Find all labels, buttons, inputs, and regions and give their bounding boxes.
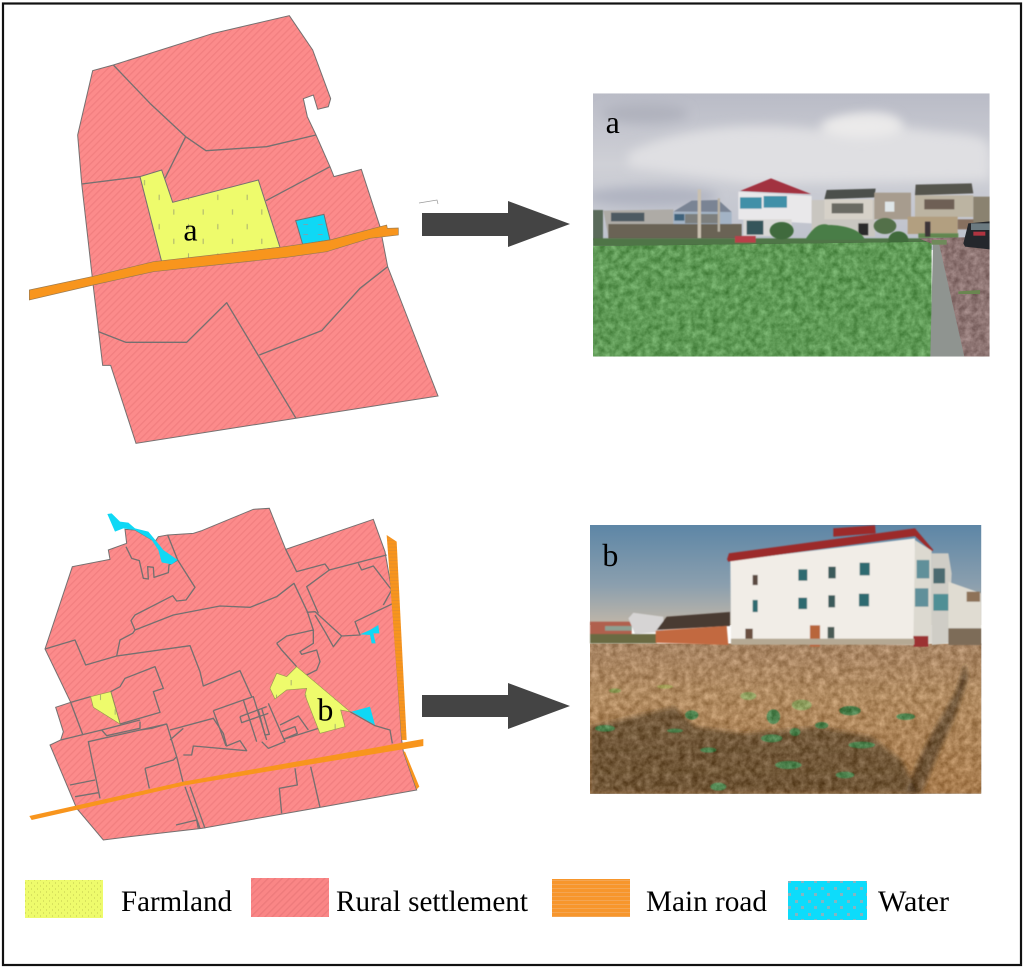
map a: upper village land use — [29, 16, 438, 443]
paved road and kerb — [918, 237, 990, 357]
parcel boundaries a — [82, 65, 388, 418]
legend: main road: Main road — [646, 885, 767, 918]
legend: water: Water — [878, 885, 949, 918]
arrow b — [422, 683, 570, 729]
legend: rural settlement: Rural settlement — [336, 885, 529, 918]
legend: farmland — [25, 880, 232, 918]
houses row — [593, 178, 990, 240]
farmland parcel a — [140, 170, 280, 262]
field shadows — [590, 663, 968, 794]
main road a — [29, 225, 398, 300]
legend — [25, 878, 949, 920]
water parcels b — [107, 513, 379, 725]
sky with clouds — [585, 93, 990, 250]
green field — [593, 242, 932, 357]
soil field with shadows and seedlings — [590, 643, 981, 794]
water parcel a — [296, 214, 330, 244]
map b: lower village land use — [29, 508, 423, 840]
legend: water — [788, 881, 949, 920]
farmland parcels b — [91, 667, 350, 733]
evening sky — [590, 525, 981, 625]
label a on map: a — [183, 212, 198, 248]
rural settlement area b — [45, 508, 417, 840]
background houses — [590, 612, 730, 645]
legend: main road — [552, 879, 767, 918]
label b on map: b — [317, 692, 333, 728]
photo b: ploughed field and white house — [590, 525, 981, 794]
hedge and shrubs — [593, 218, 959, 246]
label a on photo: a — [606, 104, 620, 140]
arrow a — [422, 201, 570, 247]
legend: rural settlement — [251, 878, 529, 918]
legend: farmland: Farmland — [121, 885, 232, 918]
main road b — [29, 535, 423, 820]
seedlings — [595, 685, 915, 791]
rural settlement area a — [78, 16, 438, 443]
parked car — [963, 221, 990, 249]
parcel boundaries b — [45, 535, 393, 828]
photo a: farmland beside houses — [585, 93, 990, 357]
label b on photo: b — [602, 537, 618, 573]
white three storey house — [727, 525, 981, 647]
